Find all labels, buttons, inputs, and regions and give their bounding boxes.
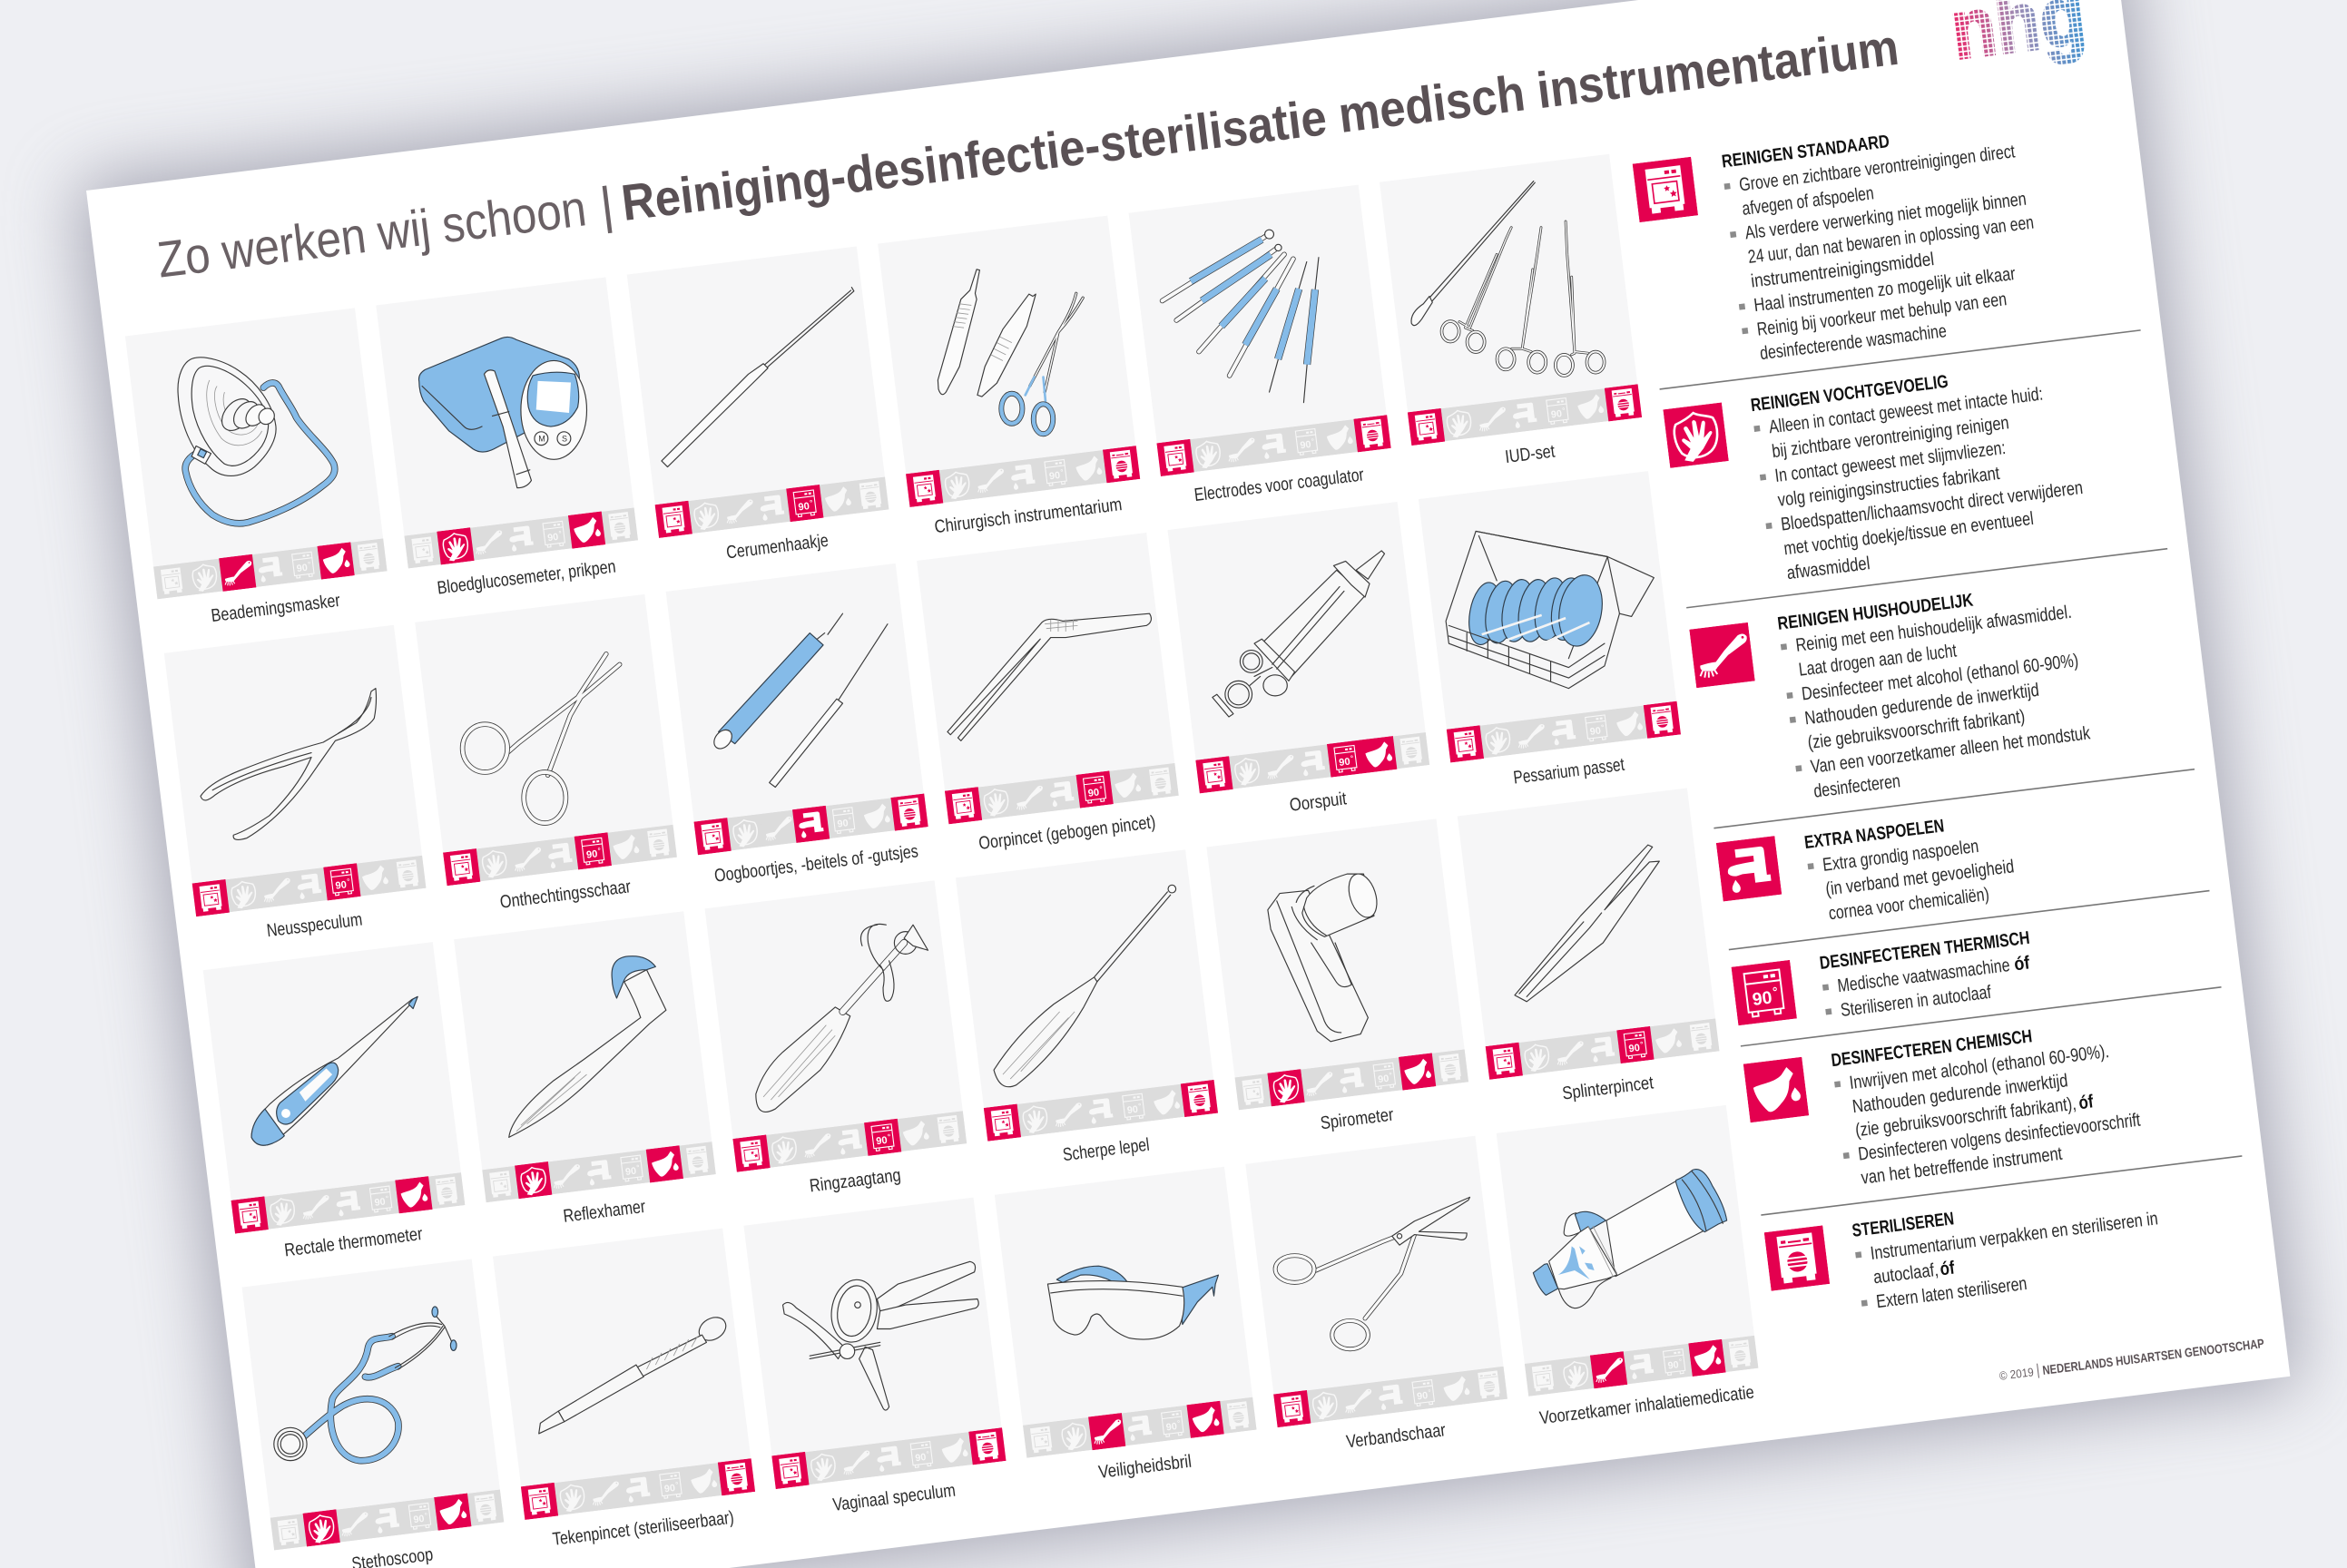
card body, status bar and label <box>917 533 1183 858</box>
card body, status bar and label <box>125 308 391 632</box>
text: reinigen standaard <box>1720 115 2047 366</box>
card body, status bar and label <box>1128 185 1395 509</box>
instrument: veiligheidsbril <box>1047 1266 1218 1339</box>
instrument: thermometer <box>251 996 417 1145</box>
instrument: scalpel, pincet, schaar <box>938 270 1083 434</box>
card body, status bar and label <box>1458 788 1723 1112</box>
card: Splinterpincet <box>1458 788 1723 1112</box>
text: reinigen vochtgevoelig: volg reinigingsinstructies fabrikant <box>1777 463 2001 511</box>
text: reinigen standaard: Reinig bij voorkeur met behulp van een <box>1756 289 2008 340</box>
text: reinigen vochtgevoelig: In contact geweest met slijmvliezen: <box>1773 437 2007 486</box>
legend: steriliseren <box>1764 1184 2165 1325</box>
text: steriliseren: óf <box>1939 1258 1956 1279</box>
text: reinigen vochtgevoelig: met vochtig doekje/tissue en eventueel <box>1782 508 2035 559</box>
card: Electrodes voor coagulator <box>1128 185 1395 509</box>
card: Voorzetkamer inhalatiemedicatie <box>1497 1105 1763 1429</box>
instrument: spirometer <box>1268 870 1382 1042</box>
card: Neusspeculum <box>164 625 430 949</box>
title <box>154 18 1901 289</box>
card body, status bar and label <box>493 1229 760 1553</box>
text: desinfecteren chemisch: van het betreffende instrument <box>1860 1143 2064 1189</box>
instrument: oogboortjes <box>711 613 888 787</box>
card body, status bar and label <box>626 247 893 571</box>
card body, status bar and label <box>1245 1136 1511 1460</box>
text: extra naspoelen: cornea voor chemicaliën) <box>1828 884 1990 924</box>
instrument: oorspuit <box>1213 551 1385 717</box>
card: Reflexhamer <box>454 911 720 1236</box>
icon: fles met druppel <box>1743 1057 1809 1122</box>
card body, status bar and label: Electrodes voor coagulator <box>1193 465 1365 505</box>
card body, status bar and label <box>743 1198 1010 1522</box>
card body, status bar and label: Oogboortjes, -beitels of -gutsjes <box>713 841 919 887</box>
card body, status bar and label: Scherpe lepel <box>1062 1135 1151 1165</box>
footer: copyright <box>1998 1336 2265 1383</box>
instrument: onthechtingsschaar <box>463 654 620 823</box>
card body, status bar and label <box>1497 1105 1763 1429</box>
instrument: splinterpincet <box>1515 845 1659 1002</box>
card: Vaginaal speculum <box>743 1198 1010 1522</box>
text: reinigen standaard: REINIGEN STANDAARD <box>1721 132 1890 172</box>
text: reinigen huishoudelijk: Nathouden gedurende de inwerktijd <box>1803 680 2040 729</box>
icon: oven <box>1633 157 1698 222</box>
legend: desinfecteren thermisch <box>1731 928 2037 1034</box>
card body, status bar and label: Vaginaal speculum <box>831 1481 957 1515</box>
card body, status bar and label <box>242 1259 508 1568</box>
card: Chirurgisch instrumentarium <box>878 216 1144 540</box>
instrument: beademingsmasker <box>178 358 335 524</box>
text: desinfecteren thermisch <box>1819 928 2037 1023</box>
legend: desinfecteren chemisch <box>1743 1014 2145 1201</box>
text: reinigen standaard: Grove en zichtbare verontreinigingen direct <box>1738 141 2017 195</box>
card body, status bar and label: Cerumenhaakje <box>725 531 830 563</box>
title: Reiniging-desinfectie-sterilisatie medisch instrumentarium <box>618 18 1901 231</box>
text: desinfecteren thermisch: DESINFECTEREN THERMISCH <box>1819 928 2031 974</box>
text: reinigen vochtgevoelig: REINIGEN VOCHTGEVOELIG <box>1750 372 1949 416</box>
card body, status bar and label: IUD-set <box>1504 441 1556 467</box>
card body, status bar and label <box>995 1167 1261 1491</box>
card body, status bar and label <box>1167 502 1434 827</box>
card body, status bar and label: Spirometer <box>1320 1105 1395 1133</box>
card body, status bar and label <box>1380 154 1646 478</box>
card: Oorpincet (gebogen pincet) <box>917 533 1183 858</box>
text: desinfecteren chemisch: óf <box>2077 1091 2095 1113</box>
card: Oorspuit <box>1167 502 1434 827</box>
title: Zo werken wij schoon <box>154 179 589 289</box>
legend: reinigen huishoudelijk <box>1689 578 2095 815</box>
text: desinfecteren chemisch: Inwrijven met alcohol (ethanol 60-90%). <box>1848 1041 2110 1093</box>
text: steriliseren: Instrumentarium verpakken en steriliseren in <box>1870 1208 2159 1264</box>
card body, status bar and label <box>376 277 642 602</box>
text: reinigen huishoudelijk <box>1776 578 2095 804</box>
legend: reinigen standaard <box>1633 115 2047 377</box>
icon: hand op doek <box>1663 402 1729 468</box>
icon: afwasborstel <box>1689 622 1755 688</box>
card body, status bar and label <box>415 594 681 918</box>
text: reinigen huishoudelijk: Reinig met een huishoudelijk afwasmiddel. <box>1794 602 2073 656</box>
card body, status bar and label: Pessarium passet <box>1512 755 1625 789</box>
text: desinfecteren thermisch: Medische vaatwasmachine <box>1836 955 2011 996</box>
card: IUD-set <box>1380 154 1646 478</box>
card: Bloedglucosemeter, prikpen <box>376 277 642 602</box>
legend: extra naspoelen <box>1716 808 2018 936</box>
card body, status bar and label: Oorspuit <box>1289 789 1348 816</box>
instrument: vaginaal speculum <box>783 1261 978 1410</box>
footer: copyright: © 2019 <box>1998 1365 2035 1383</box>
card body, status bar and label: Voorzetkamer inhalatiemedicatie <box>1538 1383 1755 1428</box>
text: reinigen huishoudelijk: Desinfecteer met alcohol (ethanol 60-90%) <box>1801 650 2079 704</box>
text: reinigen vochtgevoelig: bij zichtbare verontreiniging reinigen <box>1771 412 2010 462</box>
card body, status bar and label <box>1206 818 1473 1143</box>
text: desinfecteren chemisch <box>1830 1014 2145 1191</box>
card: Scherpe lepel <box>956 849 1222 1174</box>
card body, status bar and label: Splinterpincet <box>1561 1073 1655 1104</box>
card body, status bar and label: Rectale thermometer <box>283 1224 424 1260</box>
text: desinfecteren chemisch: (zie gebruiksvoorschrift fabrikant), <box>1854 1093 2077 1141</box>
text: desinfecteren chemisch: DESINFECTEREN CHEMISCH <box>1830 1026 2033 1071</box>
title: | <box>596 176 617 234</box>
instrument: verbandschaar <box>1275 1197 1470 1349</box>
card body, status bar and label <box>1419 471 1684 796</box>
card: Spirometer <box>1206 818 1473 1143</box>
text: reinigen huishoudelijk: Laat drogen aan de lucht <box>1798 641 1958 681</box>
icon: vaatwasmachine 90 graden <box>1732 960 1797 1025</box>
instrument: glucosemeter <box>419 337 586 488</box>
text: desinfecteren chemisch: Nathouden gedurende inwerktijd <box>1851 1070 2069 1117</box>
text: reinigen vochtgevoelig <box>1750 357 2090 585</box>
panel: legenda <box>1632 104 2255 1325</box>
card body, status bar and label: Veiligheidsbril <box>1097 1452 1193 1483</box>
text: reinigen huishoudelijk: (zie gebruiksvoorschrift fabrikant) <box>1806 706 2026 753</box>
instrument: electrodes <box>1163 230 1319 403</box>
instrument: neusspeculum <box>201 689 376 839</box>
instrument: stethoscoop <box>274 1307 457 1461</box>
card: Verbandschaar <box>1245 1136 1511 1460</box>
text: steriliseren: STERILISEREN <box>1851 1209 1955 1241</box>
card body, status bar and label <box>665 564 932 888</box>
card: Oogboortjes, -beitels of -gutsjes <box>665 564 932 888</box>
instrument: voorzetkamer <box>1533 1170 1727 1308</box>
card body, status bar and label: Beademingsmasker <box>210 591 341 626</box>
card body, status bar and label: Oorpincet (gebogen pincet) <box>977 812 1156 854</box>
instrument: cerumenhaakje <box>662 288 854 467</box>
text: reinigen standaard: Als verdere verwerking niet mogelijk binnen <box>1743 189 2028 244</box>
card: Tekenpincet (steriliseerbaar) <box>493 1229 760 1553</box>
card: Beademingsmasker <box>125 308 391 632</box>
instrument: glucosemeter: M <box>538 435 545 444</box>
text: desinfecteren chemisch: Desinfecteren volgens desinfectievoorschrift <box>1857 1110 2142 1165</box>
card body, status bar and label: Ringzaagtang <box>809 1165 902 1196</box>
instrument: tekenpincet <box>539 1313 730 1434</box>
card body, status bar and label <box>956 849 1222 1174</box>
text: reinigen standaard: instrumentreinigingsmiddel <box>1750 249 1935 292</box>
text: desinfecteren thermisch: óf <box>2013 952 2031 975</box>
card body, status bar and label: Reflexhamer <box>562 1197 647 1227</box>
text: reinigen standaard: Haal instrumenten zo mogelijk uit elkaar <box>1753 263 2017 316</box>
text: steriliseren <box>1851 1184 2165 1314</box>
card body, status bar and label: Verbandschaar <box>1345 1420 1447 1452</box>
instrument: oorpincet <box>948 613 1151 740</box>
footer: copyright: NEDERLANDS HUISARTSEN GENOOTSCHAP <box>2042 1336 2265 1377</box>
text: extra naspoelen: EXTRA NASPOELEN <box>1803 816 1945 853</box>
card body, status bar and label: Onthechtingsschaar <box>499 877 633 913</box>
text: desinfecteren thermisch: Steriliseren in autoclaaf <box>1840 982 1992 1021</box>
card: Onthechtingsschaar <box>415 594 681 918</box>
card body, status bar and label: Neusspeculum <box>266 910 364 941</box>
text: steriliseren: Extern laten steriliseren <box>1875 1273 2028 1312</box>
card: Cerumenhaakje <box>626 247 893 571</box>
card: Pessarium passet <box>1419 471 1684 796</box>
text: reinigen standaard: afvegen of afspoelen <box>1741 182 1875 220</box>
card body, status bar and label <box>164 625 430 949</box>
card body, status bar and label <box>878 216 1144 540</box>
text: extra naspoelen: (in verband met gevoeligheid <box>1824 856 2015 900</box>
card body, status bar and label: Bloedglucosemeter, prikpen <box>436 557 617 599</box>
text: reinigen huishoudelijk: desinfecteren <box>1812 770 1901 802</box>
legend: reinigen vochtgevoelig <box>1663 357 2090 596</box>
instrument: glucosemeter: S <box>562 435 567 444</box>
card body, status bar and label: Tekenpincet (steriliseerbaar) <box>552 1508 735 1550</box>
card: Rectale thermometer <box>202 942 469 1267</box>
card: Veiligheidsbril <box>995 1167 1261 1491</box>
text: reinigen standaard: desinfecterende wasmachine <box>1759 320 1948 364</box>
card body, status bar and label <box>202 942 469 1267</box>
card body, status bar and label <box>454 911 720 1236</box>
icon: autoclaaf <box>1764 1225 1830 1291</box>
text: reinigen huishoudelijk: Van een voorzetkamer alleen het mondstuk <box>1810 722 2092 778</box>
card body, status bar and label <box>704 880 971 1205</box>
instrument: iud-set <box>1411 181 1605 376</box>
instrument: ringzaagtang <box>756 924 928 1112</box>
text: extra naspoelen: Extra grondig naspoelen <box>1822 836 1979 876</box>
card: Ringzaagtang <box>704 880 971 1205</box>
text: reinigen vochtgevoelig: Alleen in contact geweest met intacte huid: <box>1768 384 2044 437</box>
text: reinigen vochtgevoelig: afwasmiddel <box>1785 553 1871 583</box>
text: reinigen huishoudelijk: REINIGEN HUISHOUDELIJK <box>1776 591 1975 634</box>
instrument: scherpe lepel <box>994 885 1176 1087</box>
card body, status bar and label: Chirurgisch instrumentarium <box>933 495 1124 537</box>
text: steriliseren: autoclaaf, <box>1872 1259 1939 1288</box>
text: reinigen standaard: 24 uur, dan nat bewaren in oplossing van een <box>1747 212 2035 268</box>
text: extra naspoelen <box>1803 808 2018 926</box>
card: Stethoscoop <box>242 1259 508 1568</box>
instrument: reflexhamer <box>509 956 666 1137</box>
instrument: pessarium passet <box>1446 531 1654 689</box>
icon: kraan <box>1716 836 1782 902</box>
text: reinigen vochtgevoelig: Bloedspatten/lichaamsvocht direct verwijderen <box>1780 477 2084 535</box>
